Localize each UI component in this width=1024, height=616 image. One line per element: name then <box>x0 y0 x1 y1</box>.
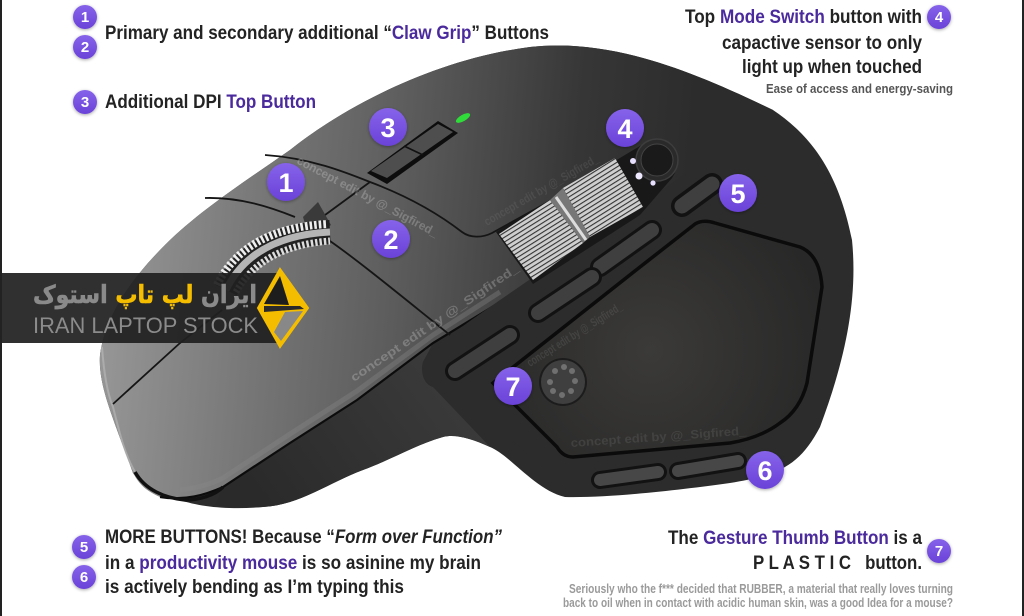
callout: button 7 <box>563 527 953 610</box>
left scroll wheel <box>217 202 331 292</box>
callout: buttons 1 and 2 <box>73 5 549 59</box>
badge 5: 5 <box>80 539 88 556</box>
green LED <box>454 111 472 125</box>
text: P L A S T I C button. <box>753 552 922 574</box>
callout: button 4 <box>685 5 953 96</box>
text: Additional DPI Top Button <box>105 91 316 113</box>
text: capactive sensor to only <box>722 32 922 54</box>
gesture thumb button <box>539 358 587 406</box>
badge 4 on mouse <box>606 109 644 147</box>
crease and rim <box>102 282 533 500</box>
scroll roller <box>496 140 678 284</box>
watermarks <box>295 151 747 450</box>
badge 3 on mouse <box>369 108 407 146</box>
logo band: Iran Laptop Stock <box>2 269 308 347</box>
badge 5 on mouse <box>719 174 757 212</box>
lower side panel <box>215 343 490 508</box>
badge 3 on mouse: 3 <box>380 113 396 143</box>
badge 5 on mouse: 5 <box>730 179 746 209</box>
watermarks: concept edit by @_Sigfired_ <box>482 151 601 229</box>
badge 4: 4 <box>935 9 944 26</box>
badge 2 <box>73 35 97 59</box>
badge 7 on mouse <box>494 367 532 405</box>
badge 1 on mouse: 1 <box>278 168 294 198</box>
callout: button 3 <box>73 90 316 114</box>
badge 3: 3 <box>81 94 89 111</box>
mouse illustration <box>100 45 853 508</box>
badge 2: 2 <box>81 39 89 56</box>
text <box>105 526 502 598</box>
text: light up when touched <box>742 56 922 78</box>
badge 3 <box>73 90 97 114</box>
badge 6 <box>72 565 96 589</box>
callout: buttons 5 and 6 <box>72 526 502 598</box>
badge 1 <box>73 5 97 29</box>
logo persian text: ایران لپ تاپ استوک <box>33 280 257 310</box>
mouse body silhouette <box>100 45 853 508</box>
badge 5 <box>72 535 96 559</box>
text <box>685 6 953 96</box>
text: Ease of access and energy-saving <box>766 82 953 96</box>
watermarks: concept edit by @_Sigfired_ <box>570 424 747 450</box>
text: MORE BUTTONS! Because “Form over Function” <box>105 526 502 548</box>
side buttons <box>455 184 738 480</box>
text: The Gesture Thumb Button is a <box>668 527 922 549</box>
badge 2 on mouse <box>372 220 410 258</box>
badge 6 on mouse: 6 <box>757 456 773 486</box>
logo diamond <box>258 269 308 347</box>
watermarks: concept edit by @_Sigfired_ <box>295 153 441 240</box>
DPI top button <box>367 121 458 184</box>
text: in a productivity mouse is so asinine my brain <box>105 552 481 574</box>
text <box>563 527 953 610</box>
badge 6: 6 <box>80 569 88 586</box>
badge 2 on mouse: 2 <box>383 225 399 255</box>
upper shell seams <box>113 146 650 404</box>
logo latin text: IRAN LAPTOP STOCK <box>33 313 258 338</box>
badge 1 on mouse <box>267 163 305 201</box>
upper shell <box>100 45 773 498</box>
watermarks: concept edit by @_Sigfired_ <box>524 299 625 370</box>
thumb pad <box>493 221 822 457</box>
text: Primary and secondary additional “Claw Grip” Buttons <box>105 22 549 44</box>
mode switch button with LEDs <box>630 139 678 186</box>
badge 4 <box>927 5 951 29</box>
watermarks: concept edit by @_Sigfired_ <box>348 261 522 384</box>
text: is actively bending as I’m typing this <box>105 576 404 598</box>
badge 6 on mouse <box>746 451 784 489</box>
badge 7 on mouse: 7 <box>505 372 521 402</box>
badge 4 on mouse: 4 <box>617 114 633 144</box>
crease highlight <box>180 292 500 490</box>
badge 7: 7 <box>935 543 943 560</box>
mouse badges <box>267 108 784 489</box>
badge 7 <box>927 539 951 563</box>
text: Top Mode Switch button with <box>685 6 922 28</box>
badge 1: 1 <box>81 9 89 26</box>
side frame around thumb pad <box>422 190 835 492</box>
